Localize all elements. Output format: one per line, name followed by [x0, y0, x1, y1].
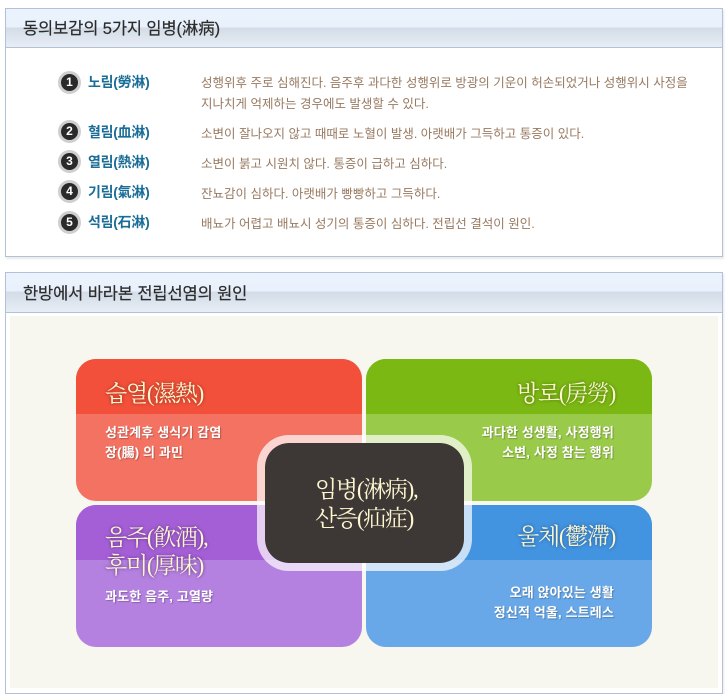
quadrant top band [76, 505, 362, 560]
list item 2 number badge: 2 [66, 124, 73, 138]
quadrant: stagnation [366, 505, 652, 647]
quadrant top band [76, 359, 362, 414]
quadrant text: drinking and rich food: 과도한 음주, 고열량 [105, 589, 213, 604]
quadrant title: drinking and rich food: 음주(飮酒), [105, 525, 207, 550]
list item 1 number badge [58, 71, 81, 94]
heading: causes: 한방에서 바라본 전립선염의 원인 [23, 285, 247, 303]
list item 5 number badge [58, 211, 81, 234]
quadrant text: stagnation [494, 585, 615, 620]
quadrant title: overwork: 방로(房勞) [517, 381, 615, 406]
list item 2 description: 소변이 잘나오지 않고 때때로 노혈이 발생. 아랫배가 그득하고 통증이 있다. [201, 127, 584, 141]
panel header bar [6, 273, 722, 313]
list item 5 description: 배뇨가 어렵고 배뇨시 성기의 통증이 심하다. 전립선 결석이 원인. [201, 217, 535, 231]
quadrant text: overwork: 과다한 성생활, 사정행위 [482, 425, 614, 440]
quadrant text: dampness heat: 성관계후 생식기 감염 [105, 425, 222, 440]
list item 4 name: 기림(氣淋) [88, 184, 150, 200]
quadrant: drinking and rich food [76, 505, 362, 647]
quadrant title: drinking and rich food: 후미(厚味) [105, 553, 203, 578]
list item 3 number badge: 3 [66, 154, 73, 168]
list item 2 number badge [58, 120, 81, 143]
list item 3 name: 열림(熱淋) [88, 154, 150, 170]
quadrant text: stagnation: 오래 앉아있는 생활 [510, 585, 614, 600]
list item 3 description: 소변이 붉고 시원치 않다. 통증이 급하고 심하다. [201, 157, 447, 171]
list item 3 number badge [58, 150, 81, 173]
list item 1 number badge: 1 [66, 75, 73, 89]
list item 4 number badge: 4 [66, 184, 73, 198]
list item 1 description: 성행위후 주로 심해진다. 음주후 과다한 성행위로 방광의 기운이 허손되었거나 성행위시 사정을 [201, 76, 688, 90]
list item 1 description: 지나치게 억제하는 경우에도 발생할 수 있다. [201, 97, 429, 111]
panel header bar [6, 9, 722, 48]
list item 5 name: 석림(石淋) [88, 214, 150, 230]
quadrant text: dampness heat: 장(腸) 의 과민 [105, 445, 183, 460]
center box title [315, 477, 418, 531]
panel: causes of prostatitis [5, 272, 723, 694]
heading: five types: 동의보감의 5가지 임병(淋病) [23, 20, 220, 38]
center box: stranguria [257, 435, 472, 571]
center box title: 임병(淋病), [315, 477, 417, 502]
quadrant text: dampness heat [105, 425, 222, 461]
quadrant: dampness heat [76, 359, 362, 501]
list item 5 number badge: 5 [66, 215, 73, 229]
list item 2 name: 혈림(血淋) [88, 124, 150, 140]
list item 4 description: 잔뇨감이 심하다. 아랫배가 빵빵하고 그득하다. [201, 187, 440, 201]
quadrant top band [366, 359, 652, 414]
cream diagram background [10, 316, 718, 688]
center box title: 산증(疝症) [315, 506, 413, 531]
quadrant: overwork [366, 359, 652, 501]
quadrant text: overwork: 소변, 사정 참는 행위 [502, 445, 614, 460]
quadrant text: overwork [482, 425, 614, 460]
quadrant top band [366, 505, 652, 560]
quadrant text: stagnation: 정신적 억울, 스트레스 [494, 605, 614, 620]
list item 1 description [201, 76, 688, 111]
quadrant title: drinking and rich food [105, 524, 209, 578]
quadrant title: dampness heat: 습열(濕熱) [105, 381, 203, 406]
list item 1 name: 노림(勞淋) [88, 74, 150, 90]
list item 4 number badge [58, 180, 81, 203]
panel: five types of stranguria [5, 8, 723, 257]
quadrant title: stagnation: 울체(鬱滯) [517, 524, 615, 549]
